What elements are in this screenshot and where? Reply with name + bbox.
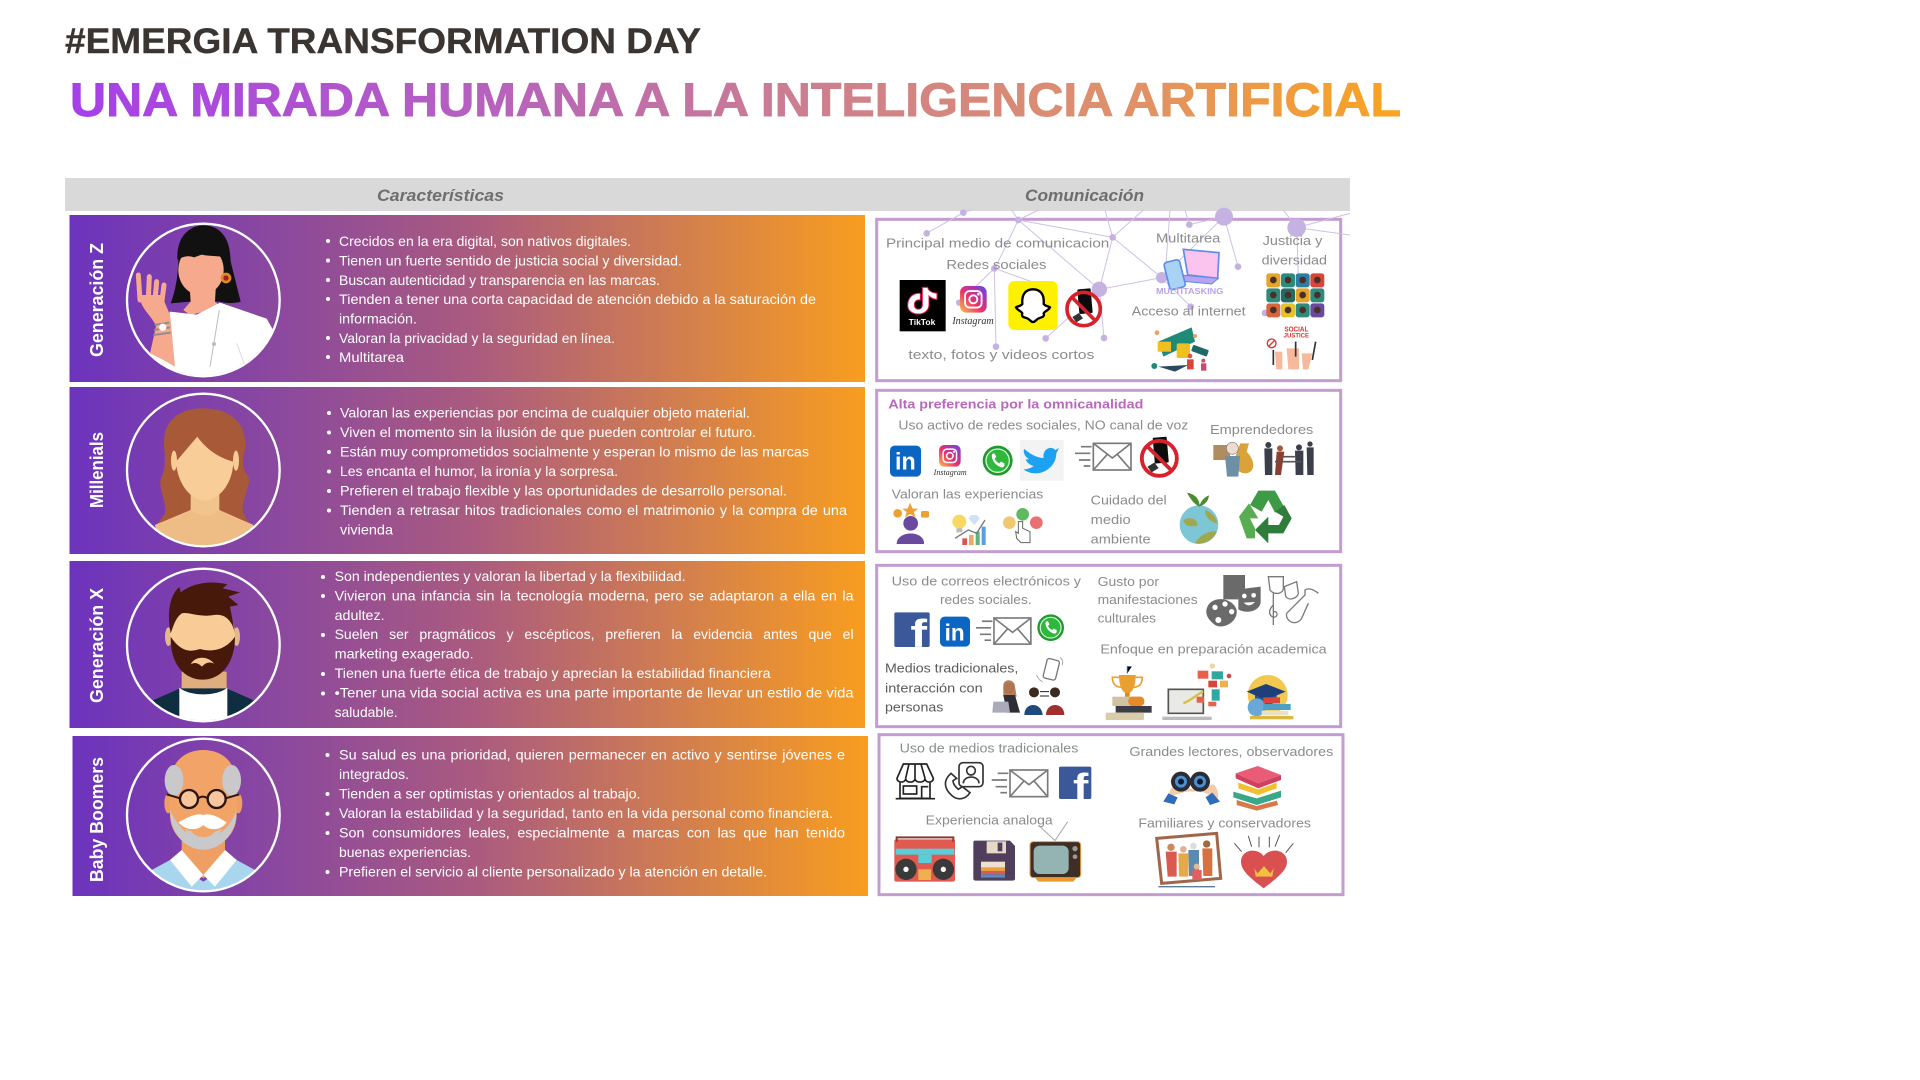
icon: TV bbox=[1030, 822, 1081, 882]
icon: masks and palette bbox=[1206, 575, 1261, 626]
text: principal medio: texto, fotos y videos cortos bbox=[908, 347, 1095, 362]
label: Generación X: Generación X bbox=[87, 588, 107, 703]
avatar: Millennial woman bbox=[127, 394, 280, 550]
text: medios tradicionales: personas bbox=[885, 700, 944, 715]
panel: Generación X characteristics bbox=[70, 561, 865, 728]
text: cuidado del medio ambiente: ambiente bbox=[1091, 531, 1151, 546]
icon: Facebook bbox=[1059, 766, 1091, 807]
icon: email bbox=[992, 770, 1048, 797]
text: medios tradicionales bbox=[885, 661, 1018, 715]
bullets: Baby Boomers: Prefieren el servicio al cliente personalizado y la atención en detalle. bbox=[339, 863, 767, 879]
icon: floppy disk bbox=[973, 841, 1015, 881]
text: principal medio: Redes sociales bbox=[946, 257, 1047, 272]
bullets: Millenials: Valoran las experiencias por encima de cualquier objeto material. bbox=[340, 404, 750, 420]
bullets: Generación Z: Valoran la privacidad y la seguridad en línea. bbox=[339, 330, 615, 346]
icon: emoji rating bbox=[1003, 508, 1043, 543]
bullets: Baby Boomers: Valoran la estabilidad y la seguridad, tanto en la vida personal como financiera. bbox=[339, 805, 833, 821]
table header: Características bbox=[377, 186, 504, 205]
icon: people talking bbox=[992, 657, 1064, 715]
bullets: Generación X: saludable. bbox=[335, 704, 398, 720]
bullets: Generación X: adultez. bbox=[335, 607, 385, 623]
decorative network bbox=[923, 208, 1350, 350]
icon: Facebook: f bbox=[910, 612, 928, 656]
table header bbox=[65, 178, 1350, 211]
bullets: Baby Boomers: Tienden a ser optimistas y orientados al trabajo. bbox=[339, 785, 640, 801]
icon: no phone bbox=[1141, 437, 1178, 477]
text: principal medio bbox=[886, 235, 1109, 362]
bullets: Baby Boomers: Son consumidores leales, especialmente a marcas con las que han tenido bbox=[339, 824, 845, 840]
bullets: Generación X bbox=[321, 568, 854, 720]
icon: email bbox=[1075, 443, 1131, 470]
bullets: Generación X: marketing exagerado. bbox=[335, 646, 474, 662]
heading: omnicanalidad: Alta preferencia por la omnicanalidad bbox=[888, 397, 1143, 411]
icon: TikTok bbox=[900, 280, 946, 331]
bullets: Generación X: •Tener una vida social activa es una parte importante de llevar un estilo de vida bbox=[335, 684, 854, 700]
panel: Baby Boomers characteristics bbox=[72, 736, 868, 896]
icon: theatre and music bbox=[1268, 577, 1318, 625]
text: manifestaciones culturales: Gusto por bbox=[1098, 574, 1160, 589]
text: grandes lectores: Grandes lectores, observadores bbox=[1129, 744, 1334, 759]
text: correos electrónicos: Uso de correos electrónicos y bbox=[892, 573, 1081, 588]
bullets: Generación X: Suelen ser pragmáticos y escépticos, prefieren la evidencia antes que el bbox=[335, 626, 854, 642]
icon: LinkedIn bbox=[890, 446, 921, 477]
text: valoran experiencias: Valoran las experiencias bbox=[892, 487, 1044, 502]
text: medios tradicionales: interacción con bbox=[885, 681, 983, 696]
bullets: Generación Z: Crecidos en la era digital, son nativos digitales. bbox=[339, 233, 631, 249]
bullets: Millenials: Están muy comprometidos socialmente y esperan lo mismo de las marcas bbox=[340, 444, 809, 460]
text: emprendedores: Emprendedores bbox=[1210, 422, 1314, 437]
label: Generación Z: Generación Z bbox=[87, 243, 107, 357]
text: cuidado del medio ambiente: Cuidado del bbox=[1091, 493, 1167, 508]
avatar: Baby Boomer man bbox=[127, 739, 280, 895]
icon: multitasking devices bbox=[1156, 249, 1223, 296]
icon: family portrait bbox=[1157, 833, 1221, 887]
icon: Snapchat bbox=[1008, 281, 1058, 330]
icon: recycling bbox=[1239, 491, 1292, 543]
bullets: Generación Z: Tienden a tener una corta capacidad de atención debido a la saturación de bbox=[339, 291, 816, 307]
panel: Baby Boomers communication bbox=[879, 735, 1343, 895]
icon: entrepreneurs bbox=[1213, 441, 1314, 477]
text: justicia y diversidad bbox=[1262, 233, 1327, 267]
icon: internet access bbox=[1151, 327, 1209, 372]
panel: Generación Z characteristics bbox=[70, 215, 865, 382]
icon: earth bbox=[1180, 493, 1218, 544]
avatar: Gen X man bbox=[127, 569, 280, 725]
table header: Comunicación bbox=[1025, 186, 1144, 205]
icon: store bbox=[896, 764, 935, 799]
icon: idea chart bbox=[952, 515, 986, 545]
bullets: Baby Boomers: buenas experiencias. bbox=[339, 844, 471, 860]
icon: LinkedIn bbox=[940, 617, 970, 647]
icon: boombox bbox=[894, 837, 955, 882]
icon: diversity grid bbox=[1266, 273, 1324, 317]
icon: graduation bbox=[1247, 675, 1293, 719]
icon: multitasking devices: MULTITASKING bbox=[1156, 286, 1223, 296]
text: manifestaciones culturales bbox=[1098, 574, 1198, 626]
text: medios tradicionales: Uso de medios tradicionales bbox=[900, 741, 1079, 756]
icon: email bbox=[976, 618, 1031, 644]
text: cuidado del medio ambiente: medio bbox=[1091, 512, 1131, 527]
bullets: Generación Z: Tienen un fuerte sentido de justicia social y diversidad. bbox=[339, 252, 682, 268]
icon: Facebook: f bbox=[1073, 766, 1090, 807]
bullets: Millenials bbox=[327, 404, 847, 538]
text: preparación academica: Enfoque en preparación academica bbox=[1100, 641, 1327, 656]
panel: Millenials communication bbox=[877, 390, 1341, 552]
text: manifestaciones culturales: culturales bbox=[1098, 611, 1156, 626]
title: UNA MIRADA HUMANA A LA INTELIGENCIA ARTIFICIAL bbox=[70, 73, 1401, 126]
bullets: Baby Boomers bbox=[326, 746, 845, 879]
panel: Generación X communication bbox=[877, 565, 1341, 727]
bullets: Millenials: Tienden a retrasar hitos tradicionales como el matrimonio y la compra de una bbox=[340, 502, 847, 518]
panel: Generación Z communication bbox=[877, 208, 1350, 381]
icon: WhatsApp bbox=[1037, 614, 1064, 641]
text: manifestaciones culturales: manifestaciones bbox=[1098, 592, 1198, 607]
icon: phone contact bbox=[945, 763, 983, 799]
icon: Twitter bbox=[1020, 440, 1064, 481]
icon: WhatsApp bbox=[983, 446, 1013, 476]
text: cuidado del medio ambiente bbox=[1091, 493, 1167, 546]
text: acceso al internet: Acceso al internet bbox=[1132, 303, 1246, 318]
panel: Millenials characteristics bbox=[70, 387, 865, 554]
icon: books bbox=[1233, 766, 1281, 811]
bullets: Generación Z: Buscan autenticidad y transparencia en las marcas. bbox=[339, 272, 660, 288]
icon: social justice bbox=[1267, 325, 1316, 369]
icon: social justice: SOCIAL bbox=[1284, 325, 1309, 334]
bullets: Millenials: Prefieren el trabajo flexible y las oportunidades de desarrollo personal. bbox=[340, 482, 787, 498]
text: multitarea: Multitarea bbox=[1156, 230, 1221, 245]
text: justicia y diversidad: Justicia y bbox=[1263, 233, 1323, 248]
icon: social justice: JUSTICE bbox=[1284, 332, 1309, 339]
icon: trophy and books bbox=[1106, 667, 1152, 720]
bullets: Millenials: Les encanta el humor, la ironía y la sorpresa. bbox=[340, 463, 618, 479]
icon: Instagram: Instagram bbox=[933, 468, 967, 477]
bullets: Baby Boomers: integrados. bbox=[339, 766, 409, 782]
text: correos electrónicos bbox=[892, 573, 1081, 607]
text: correos electrónicos: redes sociales. bbox=[940, 592, 1032, 607]
bullets: Generación Z bbox=[326, 233, 816, 365]
icon: Facebook bbox=[894, 612, 930, 656]
label: Baby Boomers: Baby Boomers bbox=[87, 757, 107, 882]
bullets: Millenials: Viven el momento sin la ilusión de que pueden controlar el futuro. bbox=[340, 424, 756, 440]
bullets: Generación X: Tienen una fuerte ética de trabajo y aprecian la estabilidad financiera bbox=[335, 665, 771, 681]
icon: Instagram: Instagram bbox=[951, 316, 994, 327]
avatar: Gen Z woman bbox=[127, 224, 280, 380]
icon: heart with crown bbox=[1234, 835, 1293, 888]
text: experiencia analoga: Experiencia analoga bbox=[926, 812, 1053, 827]
bullets: Generación X: Vivieron una infancia sin la tecnología moderna, pero se adaptaron a ella en la bbox=[335, 587, 854, 603]
bullets: Generación Z: Multitarea bbox=[339, 349, 404, 365]
text: medios tradicionales: Medios tradicionales, bbox=[885, 661, 1018, 676]
label: Millenials: Millenials bbox=[87, 432, 107, 508]
icon: laptop with messages bbox=[1162, 663, 1231, 720]
bullets: Baby Boomers: Su salud es una prioridad, quieren permanecer en activo y sentirse jóvenes e bbox=[339, 746, 845, 762]
icon: binoculars bbox=[1163, 772, 1220, 805]
icon: LinkedIn: in bbox=[945, 619, 965, 645]
icon: LinkedIn: in bbox=[895, 449, 916, 476]
icon: Instagram bbox=[933, 445, 967, 477]
bullets: Millenials: vivienda bbox=[340, 522, 393, 538]
icon: TikTok: TikTok bbox=[909, 318, 936, 327]
text: justicia y diversidad: diversidad bbox=[1262, 252, 1327, 267]
text: familiares y conservadores: Familiares y conservadores bbox=[1138, 816, 1311, 831]
text: principal medio: Principal medio de comunicacion bbox=[886, 235, 1109, 250]
icon: no phone bbox=[1066, 288, 1101, 327]
bullets: Generación Z: información. bbox=[339, 310, 417, 326]
bullets: Generación X: Son independientes y valoran la libertad y la flexibilidad. bbox=[335, 568, 686, 584]
text: redes sociales: Uso activo de redes sociales, NO canal de voz bbox=[898, 417, 1188, 432]
subtitle: #EMERGIA TRANSFORMATION DAY: #EMERGIA TRANSFORMATION DAY bbox=[65, 22, 701, 61]
icon: Instagram bbox=[951, 286, 994, 327]
icon: experience person bbox=[893, 503, 929, 544]
